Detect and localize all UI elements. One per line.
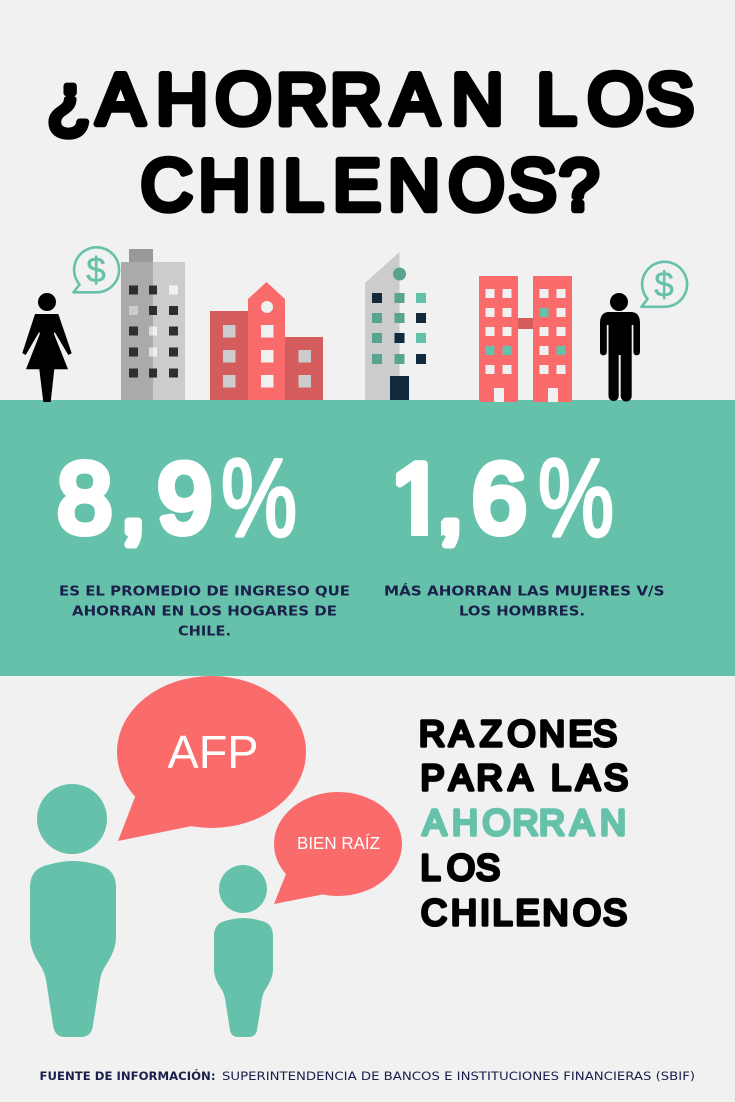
title: ¿AHORRAN LOS [47,60,694,140]
statistic: 8,9%: AHORRAN EN LOS HOGARES DE [72,604,337,620]
statistic: 8,9%: % [221,437,297,560]
heading: razones [419,713,628,933]
speech bubble: AFP [117,676,306,841]
heading: razones: LOS [420,847,500,888]
figure: adult [30,784,116,1037]
building: twin red towers [479,276,572,402]
source footer [40,1068,695,1083]
statistic: 1,6% [384,437,664,620]
statistic: 1,6%: 1 [390,443,445,553]
speech bubble: AFP: AFP [168,726,258,778]
source footer: FUENTE DE INFORMACIÓN: [40,1068,216,1083]
heading: razones: RAZONES [419,713,617,754]
building: red school [210,282,323,400]
statistic: 8,9%: CHILE. [178,624,231,640]
figure: child [214,865,273,1037]
speech bubble: bien raíz: BIEN RAÍZ [297,833,380,853]
speech bubble: bien raíz [274,792,402,904]
heading: razones: PARA LAS [420,757,628,798]
statistic: 1,6%: ,6 [437,443,527,553]
building: teal and gray tower [365,252,426,400]
statistic: 1,6%: % [538,437,614,560]
icon: dollar speech bubble right: $ [654,266,674,304]
panel: statistics band [0,400,735,676]
icon: dollar speech bubble right [642,262,687,307]
heading: razones: CHILENOS [421,892,627,933]
statistic: 1,6%: MÁS AHORRAN LAS MUJERES V/S [384,582,664,600]
statistic: 8,9%: 8,9 [58,443,212,553]
icon: dollar speech bubble left: $ [86,251,106,290]
heading: razones: AHORRAN [422,802,626,843]
building: gray tower [121,249,185,400]
source footer: SUPERINTENDENCIA DE BANCOS E INSTITUCIONES FINANCIERAS (SBIF) [222,1069,695,1083]
icon: man [600,293,640,402]
title: CHILENOS? [141,146,599,226]
icon: dollar speech bubble left [74,247,119,292]
statistic: 8,9%: ES EL PROMEDIO DE INGRESO QUE [59,584,350,600]
icon: woman [22,293,72,402]
title [47,60,694,226]
statistic: 1,6%: LOS HOMBRES. [459,604,585,620]
statistic: 8,9% [58,437,350,640]
